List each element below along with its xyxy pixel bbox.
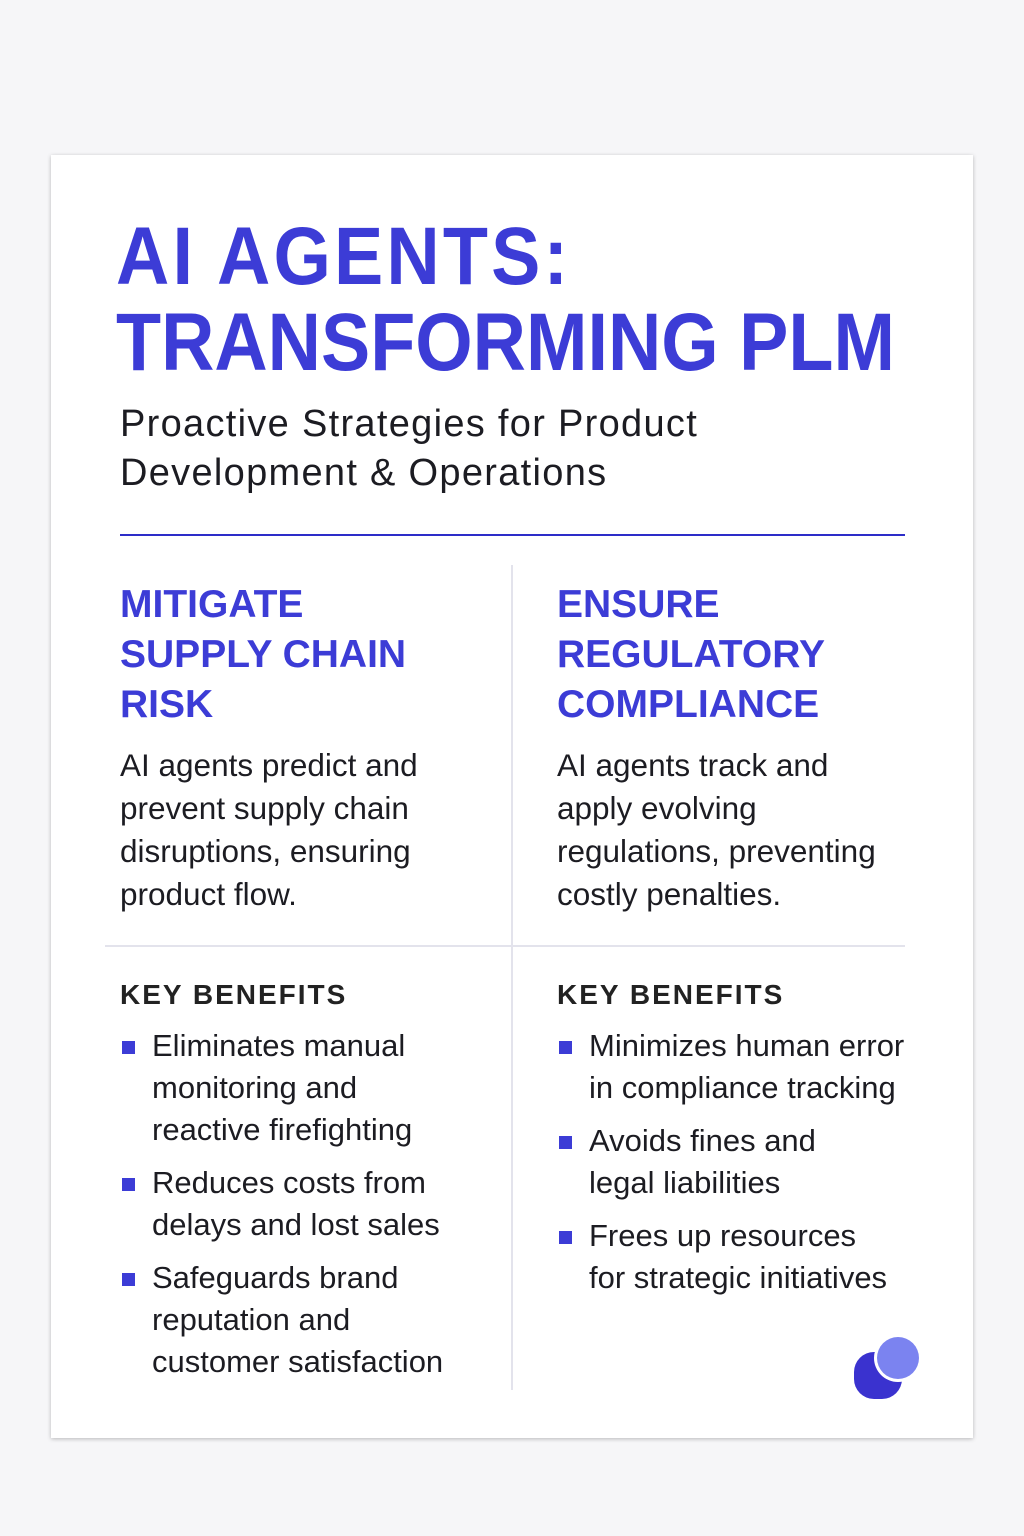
panel: supply chain heading — [120, 583, 406, 726]
benefits list left: reputation and — [152, 1302, 350, 1337]
panel: compliance heading: REGULATORY — [557, 633, 825, 676]
panel: compliance text: AI agents track and — [557, 747, 828, 783]
key benefits heading left: KEY BENEFITS — [120, 979, 347, 1010]
panel: compliance text: regulations, preventing — [557, 833, 876, 869]
subtitle: Development & Operations — [120, 452, 607, 494]
panel: supply chain text: disruptions, ensuring — [120, 833, 411, 869]
key benefits heading right: KEY BENEFITS — [557, 979, 784, 1010]
panel: compliance text: apply evolving — [557, 790, 757, 826]
benefits list left: Reduces costs from — [152, 1165, 426, 1200]
title rule — [120, 534, 905, 536]
panel: supply chain heading: MITIGATE — [120, 583, 303, 626]
benefits list left: Eliminates manual — [152, 1028, 405, 1063]
panel: compliance text — [557, 747, 876, 912]
subtitle: Proactive Strategies for Product — [120, 403, 698, 445]
card panel — [51, 155, 973, 1438]
benefits list right: legal liabilities — [589, 1165, 780, 1200]
title — [116, 211, 895, 388]
panel: supply chain heading: RISK — [120, 683, 213, 726]
panel: compliance heading: COMPLIANCE — [557, 683, 819, 726]
benefits list left: customer satisfaction — [152, 1344, 443, 1379]
benefits list right: Frees up resources — [589, 1218, 856, 1253]
benefits list left: Safeguards brand — [152, 1260, 398, 1295]
benefits list right — [559, 1028, 904, 1295]
panel: compliance heading: ENSURE — [557, 583, 720, 626]
title: TRANSFORMING PLM — [116, 297, 895, 388]
panel: compliance text: costly penalties. — [557, 876, 781, 912]
icon: logo circles — [854, 1337, 919, 1399]
benefits list left — [122, 1028, 443, 1379]
panel: supply chain text: product flow. — [120, 876, 297, 912]
panel: compliance heading — [557, 583, 825, 726]
benefits list left: monitoring and — [152, 1070, 357, 1105]
panel: supply chain heading: SUPPLY CHAIN — [120, 633, 406, 676]
benefits list right: Minimizes human error — [589, 1028, 904, 1063]
panel: supply chain text — [120, 747, 418, 912]
panel: supply chain text: AI agents predict and — [120, 747, 418, 783]
subtitle — [120, 403, 698, 494]
panel: supply chain text: prevent supply chain — [120, 790, 409, 826]
benefits list left: delays and lost sales — [152, 1207, 440, 1242]
title: AI AGENTS: — [116, 211, 571, 302]
benefits list right: in compliance tracking — [589, 1070, 896, 1105]
benefits list left: reactive firefighting — [152, 1112, 412, 1147]
benefits list right: Avoids fines and — [589, 1123, 816, 1158]
benefits list right: for strategic initiatives — [589, 1260, 887, 1295]
